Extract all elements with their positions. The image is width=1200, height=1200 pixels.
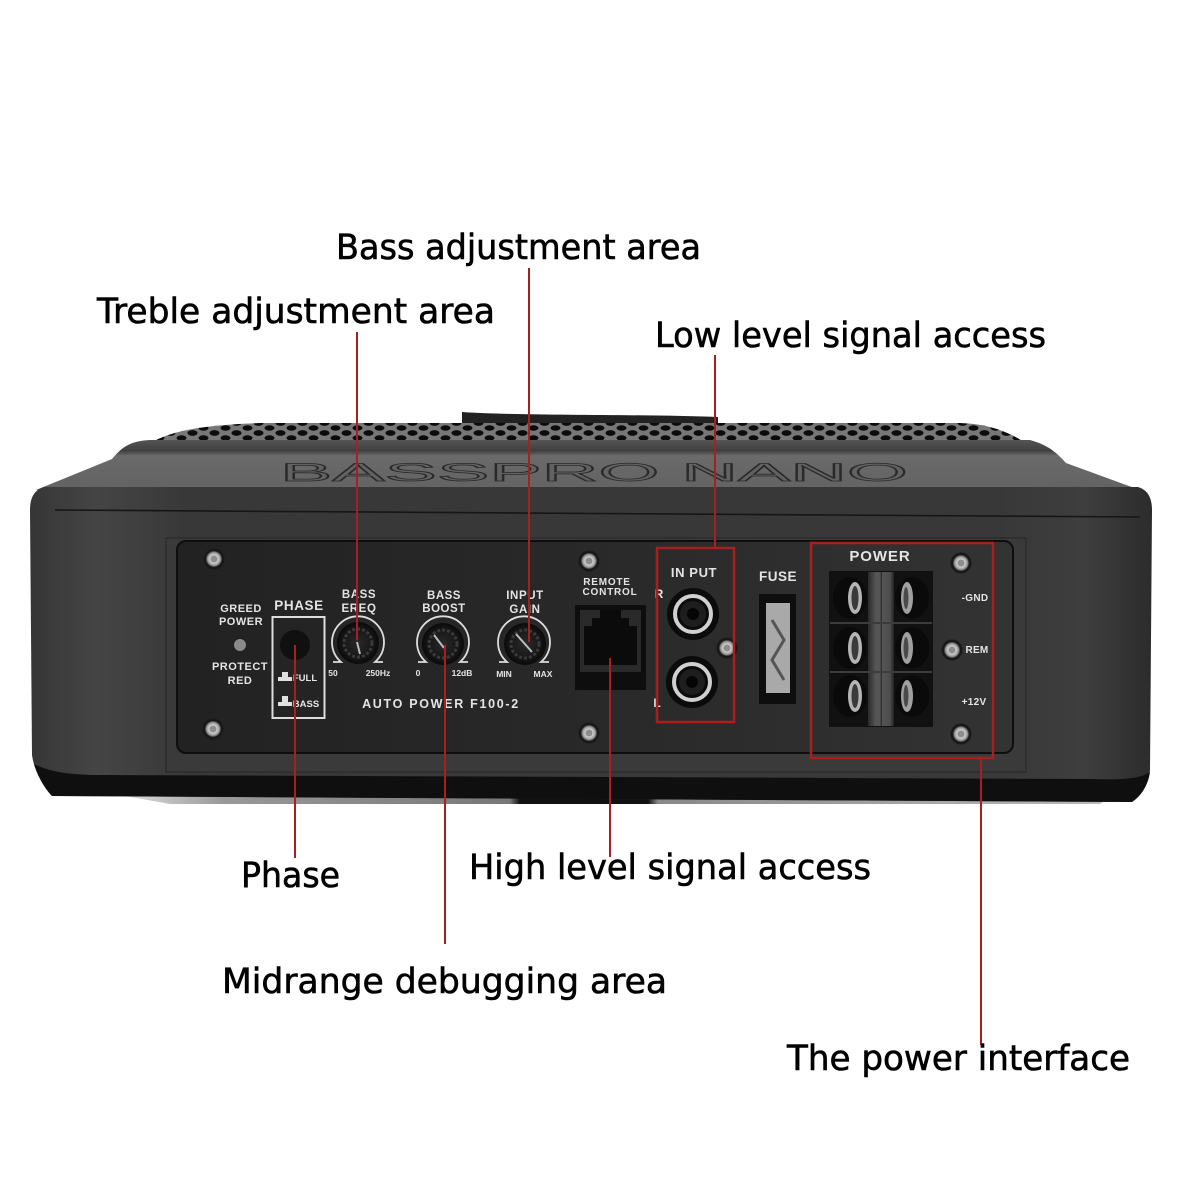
power terminal block: POWER [849,548,911,565]
speaker unit [30,412,1152,804]
status LED and labels: POWER [219,616,263,628]
power terminal labels: REM [965,645,989,656]
label: bass adjustment area: Bass adjustment area [336,228,701,268]
input gain knob: MAX [534,669,553,679]
label: treble adjustment area: Treble adjustment area [96,292,495,332]
bass freq knob: BASS [342,589,376,601]
label: midrange debugging area: Midrange debugging area [222,962,667,1002]
status LED and labels [212,603,268,687]
remote control jack [575,577,646,690]
bass boost knob: BOOST [422,603,466,615]
phase switch: FULL [293,673,317,684]
model name: AUTO POWER F100-2 [362,697,520,711]
plate screws [202,548,972,744]
phase switch [272,598,324,718]
line: phase [294,645,296,858]
bass boost knob: 0 [416,668,421,678]
bass boost knob [416,590,472,678]
power terminal labels: -GND [962,593,988,604]
power terminal block [829,548,933,727]
bass freq knob: 250Hz [366,668,390,678]
line: high level signal [609,658,611,857]
line: power interface [980,758,982,1045]
input gain knob: GAIN [509,604,541,616]
box: low level input [657,548,734,722]
RCA input jacks: L [653,696,661,710]
bass boost knob: BASS [427,590,461,602]
strap on top [462,412,718,430]
power terminal labels [962,593,989,708]
red callout lines and boxes [295,268,993,1045]
label: the power interface: The power interface [786,1039,1130,1079]
line: treble adjustment [356,332,358,640]
phase switch: BASS [293,699,319,710]
label: phase: Phase [241,856,340,896]
input gain knob: INPUT [506,590,544,602]
control panel plate [177,541,1013,753]
front body [30,487,1152,802]
line: midrange debugging [444,645,446,944]
fuse holder: FUSE [759,569,797,584]
speaker grill [154,423,1030,446]
line: bass adjustment [528,268,530,642]
RCA input jacks: IN PUT [671,565,717,580]
ground shadow strip [125,796,1112,804]
phase switch: PHASE [274,598,324,613]
line: low level signal [714,355,716,548]
fuse holder [759,569,797,704]
input gain knob [496,590,553,679]
remote control jack: CONTROL [582,587,638,598]
bass freq knob: EREQ [342,603,376,615]
bass boost knob: 12dB [452,668,472,678]
embossed brand: BASSPRO NANO: BASSPRO NANO [280,459,908,487]
bass freq knob: 50 [328,668,338,678]
status LED and labels: PROTECT [212,661,268,673]
lower dark band [34,764,1150,802]
status LED and labels: RED [228,675,252,687]
status LED and labels: GREED [220,603,262,615]
box: power interface [811,543,993,758]
remote control jack: REMOTE [583,577,631,588]
power terminal labels: +12V [962,697,986,708]
label: high level signal access: High level signal access [469,848,871,888]
RCA input jacks [653,565,719,710]
top face of the case [36,440,1148,493]
RCA input jacks: R [655,587,664,601]
case groove line [55,510,1140,517]
bass freq knob [328,589,390,678]
label: low level signal access: Low level signal access [655,316,1046,356]
recess around the plate [166,538,1026,772]
input gain knob: MIN [496,669,512,679]
